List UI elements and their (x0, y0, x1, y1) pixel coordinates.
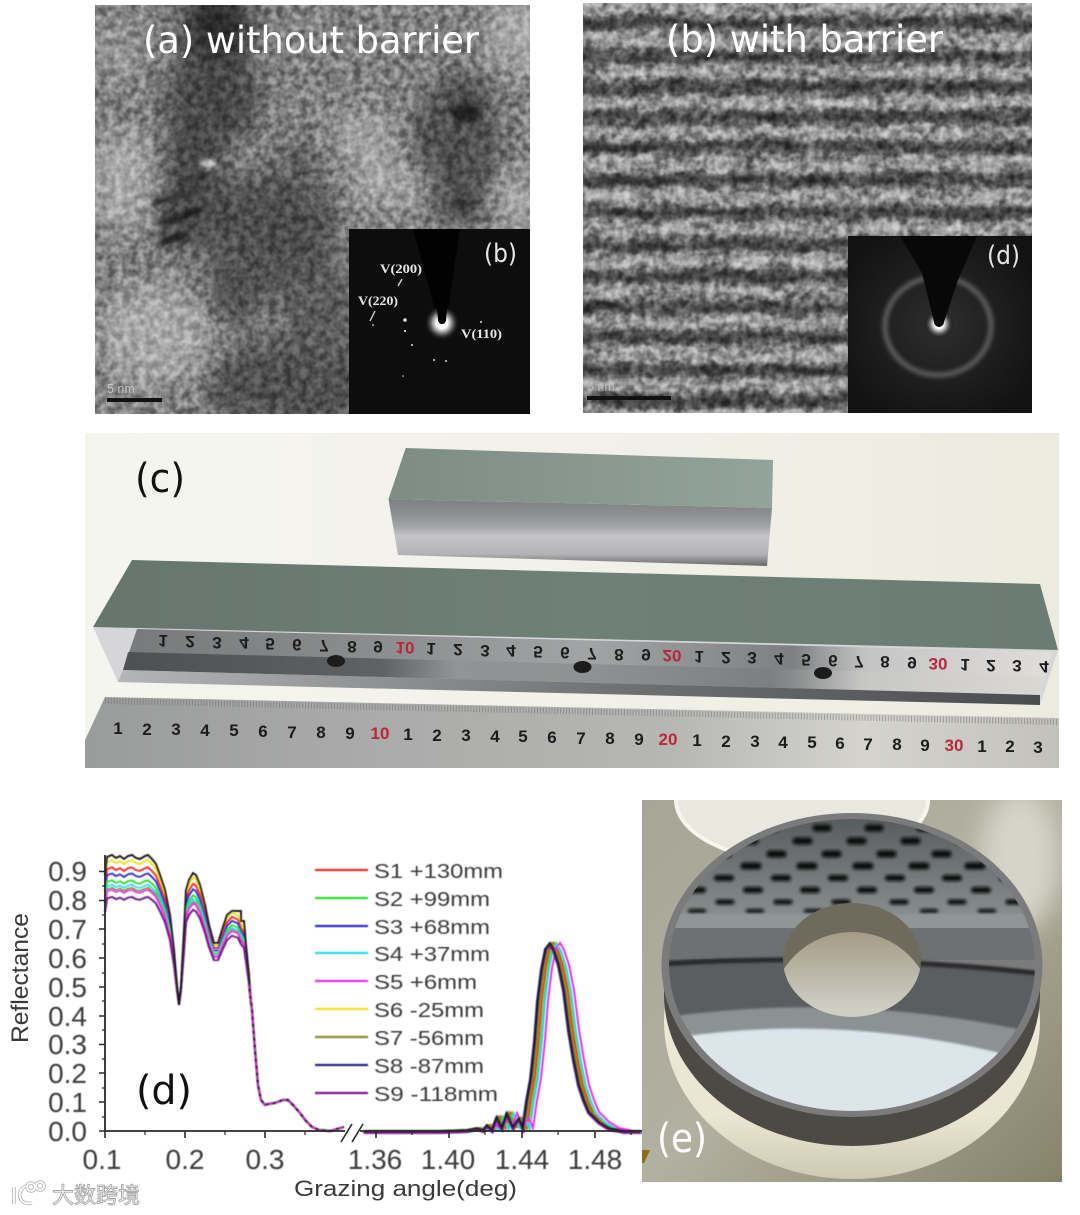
ruler scale ticks (105, 701, 1059, 722)
y axis tick labels: 0.4 (48, 1001, 87, 1032)
curve S9 (105, 897, 641, 1133)
ruler digits: 1 (977, 737, 987, 756)
reflected ruler digits: 2 (721, 648, 731, 667)
central aperture (783, 903, 921, 1017)
ruler digits: 6 (258, 722, 268, 741)
y axis tick labels (48, 856, 87, 1147)
legend: S2 +99mm (374, 888, 490, 911)
ruler digits: 3 (1033, 738, 1043, 757)
reflected ruler digits: 2 (453, 640, 463, 659)
inset label d: (d) (987, 241, 1020, 271)
legend: S3 +68mm (374, 916, 490, 939)
y axis tick labels: 0.1 (48, 1087, 87, 1118)
curve S3 (105, 873, 642, 1133)
panel b base tone (583, 3, 1032, 413)
reflected ruler digits: 5 (801, 650, 811, 669)
x axis tick labels: 1.44 (495, 1144, 549, 1175)
small olive marker (642, 1150, 650, 1163)
reflected ruler digits: 2 (986, 656, 996, 675)
reflected ruler digits: 6 (828, 651, 838, 670)
reflected ruler digits: 7 (319, 636, 329, 655)
y axis tick labels: 0.5 (48, 972, 87, 1003)
ruler digits: 8 (892, 735, 902, 754)
aperture inner wall (780, 900, 925, 1020)
small block front face (388, 499, 772, 566)
x axis tick labels: 0.1 (83, 1144, 121, 1175)
ruler digits: 4 (778, 733, 788, 752)
panel d: reflectance chart (7, 855, 651, 1201)
reflected ruler digits (158, 631, 1049, 676)
reflected ruler digits: 6 (560, 643, 570, 662)
y axis tick labels: 0.7 (48, 914, 87, 945)
central beam glow (924, 309, 954, 339)
curve S1 (105, 867, 645, 1131)
ruler body (85, 697, 1059, 768)
y axis tick labels: 0.3 (48, 1029, 87, 1060)
panel a density blotches (88, 0, 547, 430)
bright table reflection (980, 790, 1060, 930)
ruler digits: 8 (605, 729, 615, 748)
bright reflected window (691, 1027, 999, 1111)
reflected ruler digits: 4 (1039, 657, 1049, 676)
ruler digits: 9 (634, 730, 644, 749)
curve S7 (105, 888, 643, 1131)
legend: S4 +37mm (374, 943, 490, 966)
x axis tick labels: 1.48 (568, 1144, 622, 1175)
beam stop tip (436, 300, 448, 324)
label V(110): V(110) (461, 326, 502, 341)
ruler digits: 4 (490, 727, 500, 746)
x axis tick labels: 1.36 (348, 1144, 402, 1175)
ruler digits: 6 (547, 728, 557, 747)
y axis title: Reflectance (7, 913, 34, 1043)
reflected ruler digits: 2 (185, 632, 195, 651)
reflected ruler digits: 20 (663, 646, 681, 665)
long block front face (93, 627, 1058, 705)
axes (99, 855, 642, 1142)
light grey reflected band (680, 1006, 1017, 1059)
reflected ruler digits: 4 (506, 641, 516, 660)
ruler digits (113, 719, 1043, 757)
central beam glow (424, 305, 460, 341)
curve S5 (105, 890, 651, 1131)
panel d label: (d) (136, 1068, 192, 1114)
ruler digits: 9 (920, 736, 930, 755)
panel a scale bar (107, 382, 162, 402)
mirrored ruler dark lower strip (123, 652, 1046, 695)
reflected ruler digits: 6 (292, 635, 302, 654)
reflected perforated ceiling (681, 819, 1023, 914)
reflected ruler digits: 5 (533, 642, 543, 661)
legend: S6 -25mm (374, 999, 484, 1022)
small mirror block (388, 448, 773, 566)
x axis tick labels (83, 1144, 622, 1175)
x axis title: Grazing angle(deg) (294, 1176, 517, 1201)
steel ruler (85, 697, 1059, 768)
white holder plate (664, 1007, 1040, 1179)
ruler digits: 3 (750, 732, 760, 751)
small block top face (388, 448, 773, 508)
ruler digits: 1 (403, 725, 413, 744)
reflected ruler digits: 8 (614, 645, 624, 664)
panel c: mirror photo (85, 433, 1059, 768)
mirror rim (662, 813, 1042, 1117)
ruler digits: 2 (432, 726, 442, 745)
shared falling tail (249, 985, 344, 1131)
reflected ruler digits: 4 (239, 633, 249, 652)
panel a dark lattice streaks (148, 103, 479, 248)
ruler digits: 7 (576, 729, 586, 748)
watermark logo fill (14, 1182, 44, 1204)
amorphous ring (885, 277, 991, 375)
legend: S5 +6mm (374, 971, 477, 994)
diffraction spots (372, 318, 482, 377)
y axis tick labels: 0.9 (48, 856, 87, 887)
panel b scale bar (587, 382, 671, 400)
dark reflected line (660, 960, 1045, 974)
label V(220): V(220) (358, 293, 398, 308)
label V(200): V(200) (380, 261, 422, 276)
reflected ruler digits: 3 (212, 633, 222, 652)
beam stop cone (413, 229, 460, 323)
panel a diffraction inset (349, 229, 530, 414)
ruler digits: 6 (835, 734, 845, 753)
small pointers (370, 279, 402, 321)
watermark (14, 1178, 140, 1210)
grey reflected band (660, 928, 1045, 960)
ceiling holes (660, 828, 1045, 911)
ruler digits: 5 (229, 721, 239, 740)
y axis tick labels: 0.6 (48, 943, 87, 974)
inset label b: (b) (484, 239, 517, 269)
panel c label: (c) (135, 456, 185, 502)
y axis tick labels: 0.8 (48, 885, 87, 916)
legend: S1 +130mm (374, 860, 503, 883)
reflected ruler digits: 30 (929, 654, 947, 673)
panel b fine grain (583, 3, 1032, 413)
legend: S9 -118mm (374, 1083, 498, 1106)
long mirror block (93, 560, 1058, 705)
reflected ruler digits: 9 (907, 653, 917, 672)
ruler digits: 7 (863, 735, 873, 754)
panel b title: (b) with barrier (666, 18, 944, 61)
ruler digits: 30 (945, 736, 963, 755)
ruler digits: 2 (142, 720, 152, 739)
x axis tick labels: 0.2 (166, 1144, 204, 1175)
legend (315, 860, 503, 1106)
ruler digits: 3 (461, 726, 471, 745)
ruler digits: 7 (287, 723, 297, 742)
ruler digits: 10 (371, 724, 389, 743)
reflected ruler digits: 1 (960, 655, 970, 674)
lower metal strip (118, 670, 1040, 705)
ruler digits: 4 (200, 721, 210, 740)
reflected ruler digits: 8 (880, 652, 890, 671)
mirror side wall (664, 990, 1040, 1146)
panel e: annular mirror photo (642, 800, 1062, 1182)
mid reflected band (669, 960, 1034, 1048)
ruler digits: 3 (171, 720, 181, 739)
ruler digits: 5 (518, 727, 528, 746)
panel a grain (95, 5, 530, 414)
reflected ruler digits: 3 (1012, 656, 1022, 675)
ruler digits: 9 (345, 724, 355, 743)
long block top face (93, 560, 1058, 650)
reflected ruler digits: 7 (854, 652, 864, 671)
white container behind (674, 800, 930, 852)
reflected ruler digits: 1 (426, 639, 436, 658)
panel b grain (583, 3, 1032, 413)
reflected ruler digits: 7 (587, 644, 597, 663)
reflected ruler digits: 10 (396, 638, 414, 657)
metal table background (642, 800, 1062, 1182)
panel a title: (a) without barrier (143, 19, 480, 62)
legend: S8 -87mm (374, 1055, 484, 1078)
panel b dark layers (575, 23, 1040, 400)
tail overlay (249, 985, 344, 1131)
panel b: TEM with barrier (575, 3, 1040, 413)
beam stop (900, 236, 977, 327)
x axis tick labels: 1.40 (421, 1144, 475, 1175)
ruler digits: 8 (316, 723, 326, 742)
ruler digits: 20 (659, 730, 677, 749)
black reference curve (105, 855, 641, 1131)
reflected ruler digits: 3 (747, 648, 757, 667)
ruler digits: 2 (1005, 737, 1015, 756)
ruler digits: 2 (721, 732, 731, 751)
watermark logo outline (14, 1182, 44, 1204)
panel a: TEM without barrier (88, 0, 547, 430)
curve S4 (105, 885, 648, 1132)
reflected ruler digits: 1 (158, 631, 168, 650)
curve S6 (105, 860, 644, 1131)
reflected ruler digits: 3 (480, 641, 490, 660)
panel a base tone (95, 5, 530, 414)
reflectance curves (105, 855, 651, 1133)
ruler digits: 1 (113, 719, 123, 738)
watermark text: 大数跨境 (52, 1178, 140, 1210)
curve S8 (105, 897, 640, 1132)
panel b diffraction inset (848, 236, 1032, 413)
y axis tick labels: 0.0 (48, 1116, 87, 1147)
reflected ruler digits: 4 (774, 649, 784, 668)
y axis tick labels: 0.2 (48, 1058, 87, 1089)
panel b scale bar: 5 nm (587, 380, 615, 394)
mirrored ruler band (123, 629, 1052, 695)
x axis tick labels: 0.3 (246, 1144, 284, 1175)
reflected ruler digits: 5 (265, 634, 275, 653)
reflected ruler digits: 8 (347, 637, 357, 656)
ruler digits: 5 (807, 733, 817, 752)
reflected ruler digits: 9 (373, 637, 383, 656)
mirror reflective face (660, 815, 1045, 1115)
legend: S7 -56mm (374, 1027, 484, 1050)
holes in ruler (327, 655, 832, 679)
photo background (85, 433, 1059, 768)
reflected ruler digits: 9 (641, 645, 651, 664)
aperture floor (784, 932, 920, 1017)
ruler digits: 1 (692, 731, 702, 750)
curve S2 (105, 880, 647, 1131)
panel a scale bar: 5 nm (107, 382, 135, 396)
panel e label: (e) (657, 1116, 707, 1162)
light reflected streak (675, 912, 1029, 928)
reflected ruler digits: 1 (694, 647, 704, 666)
